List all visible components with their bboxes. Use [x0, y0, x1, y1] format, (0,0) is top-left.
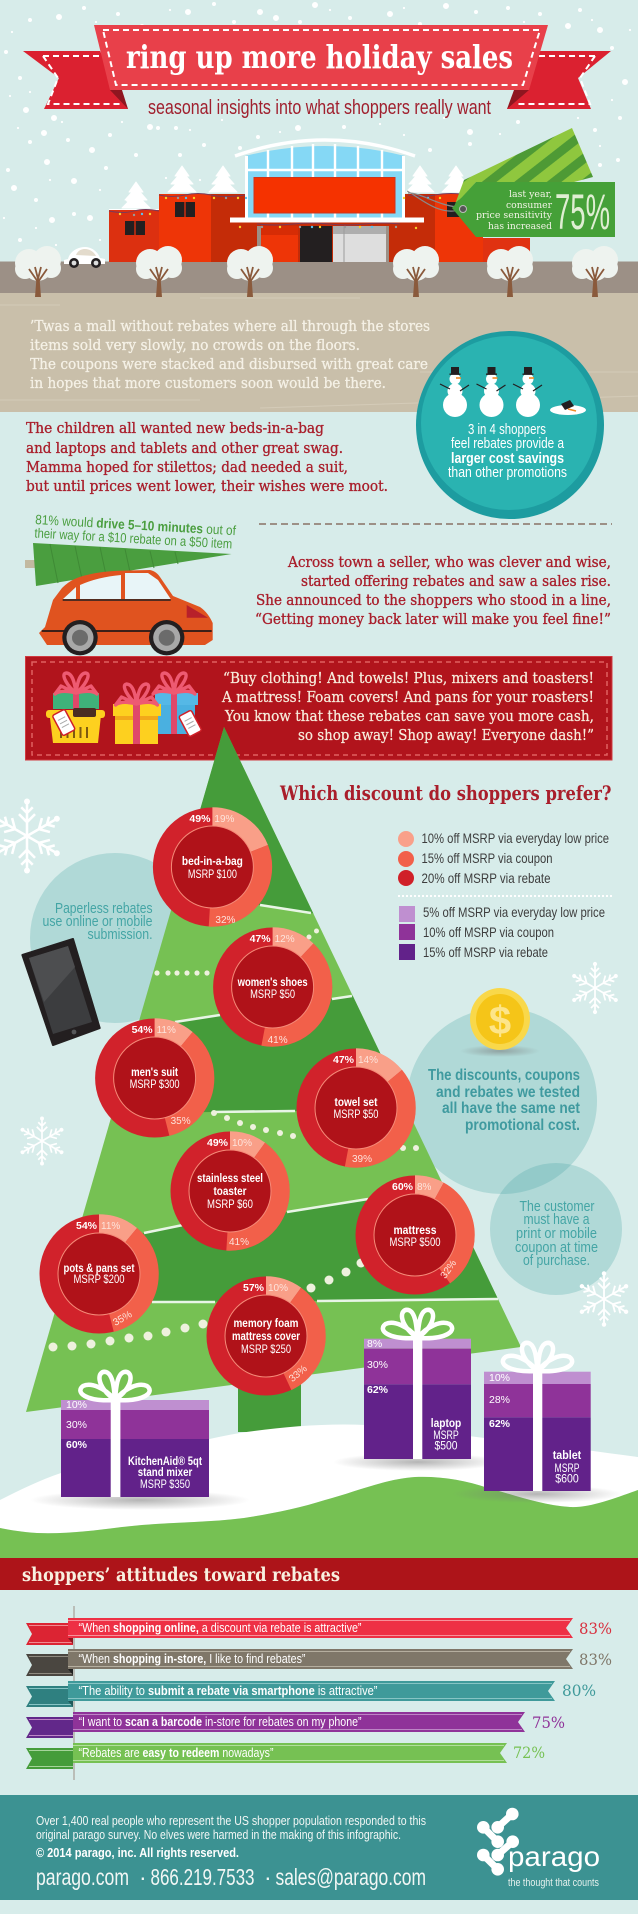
bar: shopping in-store 83%: “When shopping in-store, I like to find rebates” — [78, 1652, 306, 1666]
tag text — [476, 189, 553, 232]
top dark band — [200, 727, 314, 914]
drive stat text: their way for a $10 rebate on a $50 item — [34, 525, 233, 552]
verse 3: started offering rebates and saw a sales rise. — [301, 572, 611, 590]
tree on car roof — [33, 543, 232, 586]
gift values: 8% — [367, 1338, 382, 1350]
stat text: 3 in 4 shoppers — [468, 421, 546, 438]
gift label: MSRP $350 — [140, 1477, 190, 1491]
gift: stand mixer — [30, 1372, 250, 1510]
verse 1 — [30, 317, 430, 392]
survey note: original parago survey. No elves were harmed in the making of this infographic. — [36, 1828, 401, 1842]
donut chart: bed-in-a-bag — [153, 808, 272, 926]
tree trunk — [238, 1380, 301, 1432]
donut chart: mattress: 60% — [392, 1181, 414, 1193]
donut chart: towel set: 47% — [333, 1054, 355, 1066]
subtitle: seasonal insights into what shoppers really want — [148, 97, 491, 119]
snow hill — [0, 1424, 638, 1533]
donut chart: bed-in-a-bag: MSRP $100 — [188, 867, 237, 881]
gift values — [66, 1399, 88, 1451]
donut chart: women's shoes — [213, 928, 332, 1046]
verse 4: “Buy clothing! And towels! Plus, mixers and toasters! — [223, 669, 594, 687]
ribbon left tail — [23, 51, 128, 109]
tag eyelet — [460, 206, 466, 212]
icon: gold coin — [460, 988, 540, 1057]
donut chart: towel set: 39% — [352, 1154, 372, 1165]
ribbon right tail — [507, 51, 611, 109]
discounts note text: and rebates we tested — [436, 1084, 580, 1101]
icon: gold coin: $ — [489, 999, 511, 1043]
snowman stat circle — [416, 331, 604, 519]
melted snowman icon — [550, 400, 586, 415]
donut chart: memory foam mattress cover: 33% — [287, 1363, 310, 1385]
stat text: than other promotions — [448, 464, 567, 481]
title ribbon — [23, 25, 611, 109]
donut chart: towel set: MSRP $50 — [334, 1107, 379, 1121]
gift label: laptop — [431, 1416, 461, 1430]
verse 1: in hopes that more customers soon would be there. — [30, 374, 386, 392]
donut chart: memory foam mattress cover: mattress cover — [232, 1329, 300, 1343]
customer note text — [515, 1199, 598, 1269]
road — [0, 262, 638, 293]
verse 4 — [221, 669, 594, 744]
donut chart: mattress: MSRP $500 — [390, 1235, 441, 1249]
parago logo: the thought that counts — [508, 1877, 599, 1889]
verse 1: ’Twas a mall without rebates where all through the stores — [30, 317, 430, 335]
gift label: tablet — [553, 1448, 581, 1462]
discounts blob — [407, 1008, 597, 1194]
gift values — [489, 1372, 511, 1430]
falling snow — [4, 4, 630, 245]
donut chart: men's suit: men's suit — [131, 1065, 178, 1079]
discounts note text: all have the same net — [442, 1100, 581, 1117]
green tag — [452, 182, 615, 237]
verse 4: You know that these rebates can save you more cash, — [224, 707, 594, 725]
legend: donuts — [398, 830, 609, 886]
car with tree illustration — [25, 512, 237, 655]
bar: smartphone 80%: 80% — [562, 1681, 596, 1700]
legend: gifts — [399, 904, 605, 960]
discounts note text: promotional cost. — [465, 1117, 580, 1134]
discounts note text — [428, 1067, 581, 1134]
contact line: 866.219.7533 — [150, 1864, 254, 1890]
price tag callout — [407, 128, 615, 240]
footer — [0, 1795, 638, 1900]
bar: shopping online 83%: 83% — [579, 1619, 612, 1638]
donut chart: bed-in-a-bag: 49% — [189, 813, 211, 825]
donut chart: pots and pans set: MSRP $200 — [74, 1272, 125, 1286]
icon: blue gift — [153, 673, 202, 737]
bar: smartphone 80% — [26, 1681, 596, 1707]
verse 3 — [255, 553, 611, 628]
legend labels purple: 15% off MSRP via rebate — [423, 944, 548, 960]
discounts note text: The discounts, coupons — [428, 1067, 580, 1084]
donut chart: men's suit: 54% — [132, 1024, 153, 1036]
donut chart: women's shoes: 47% — [250, 933, 271, 945]
donut chart: memory foam mattress cover — [206, 1276, 326, 1396]
donut chart: memory foam mattress cover: MSRP $250 — [241, 1342, 291, 1356]
teal circle — [416, 331, 604, 519]
donut chart: bed-in-a-bag: 32% — [215, 915, 236, 926]
parago logo — [477, 1808, 600, 1889]
arched window — [235, 140, 415, 222]
donut chart: stainless steel toaster: 10% — [232, 1138, 252, 1149]
gift values: 28% — [489, 1394, 510, 1406]
legend labels purple: 10% off MSRP via coupon — [423, 924, 554, 940]
donut chart: memory foam mattress cover: 57% — [243, 1282, 265, 1294]
panel background — [26, 656, 612, 760]
drive stat text: 81% would drive 5–10 minutes out of — [35, 512, 237, 538]
donut chart: mattress — [356, 1176, 474, 1294]
header text: shoppers’ attitudes toward rebates — [22, 1564, 340, 1586]
customer note text: coupon at time — [515, 1240, 598, 1256]
snowflake large left — [0, 799, 63, 873]
legend labels red — [422, 830, 609, 886]
gift label: stand mixer — [138, 1465, 193, 1479]
donut chart: pots and pans set: 35% — [111, 1309, 134, 1329]
paperless blob — [30, 853, 200, 1023]
gift values: 10% — [66, 1399, 87, 1411]
gift values: 30% — [66, 1419, 87, 1431]
donut chart: men's suit: MSRP $300 — [130, 1077, 180, 1091]
gift label: $500 — [434, 1438, 458, 1452]
verse 1: items sold very slowly, no crowds on the floors. — [30, 336, 360, 354]
donut chart: memory foam mattress cover: memory foam — [234, 1316, 298, 1330]
gift label: KitchenAid® 5qt — [128, 1454, 202, 1468]
snow-covered roadside trees — [15, 246, 618, 297]
contact line — [36, 1864, 426, 1890]
donut chart: pots and pans set: 11% — [101, 1221, 120, 1232]
gift label: MSRP — [433, 1428, 459, 1442]
bar: shopping in-store 83% — [26, 1649, 612, 1676]
tag text: last year, — [509, 189, 552, 200]
ribbon main band — [94, 25, 548, 90]
axis — [74, 1606, 75, 1780]
donut chart: mattress: mattress — [394, 1223, 437, 1237]
paperless text: use online or mobile — [42, 914, 152, 930]
parago logo: parago — [508, 1841, 600, 1872]
donut chart: stainless steel toaster — [170, 1132, 290, 1250]
entrance — [245, 222, 389, 262]
gift: laptop — [333, 1310, 503, 1471]
survey note — [36, 1814, 426, 1842]
donut chart: stainless steel toaster: 41% — [229, 1237, 249, 1248]
verse 1: The coupons were stacked and disbursed with great care — [30, 355, 428, 373]
verse 3: “Getting money back later will make you feel fine!” — [255, 610, 611, 628]
gift: tablet — [452, 1343, 622, 1503]
gift bow — [503, 1343, 572, 1371]
contact line: · — [139, 1864, 147, 1890]
small white car — [64, 247, 105, 268]
header band — [0, 1558, 638, 1590]
donut chart: stainless steel toaster: MSRP $60 — [207, 1197, 253, 1211]
tree trunk on car — [25, 560, 35, 568]
customer note text: print or mobile — [516, 1226, 597, 1242]
verse 3: Across town a seller, who was clever and wise, — [287, 553, 611, 571]
legend swatches red — [398, 831, 414, 886]
store sign — [254, 178, 395, 213]
bar: easy to redeem 72% — [26, 1743, 545, 1769]
paperless text: Paperless rebates — [55, 901, 152, 917]
bar: shopping online 83% — [26, 1618, 612, 1645]
decorative pale blobs — [30, 853, 622, 1295]
verse 3: She announced to the shoppers who stood in a line, — [256, 591, 611, 609]
gift values: 30% — [367, 1359, 388, 1371]
tag text: consumer — [506, 200, 552, 211]
contact line: · — [264, 1864, 272, 1890]
stat text: larger cost savings — [451, 450, 564, 467]
store left wing — [109, 194, 245, 262]
gift bow — [80, 1372, 150, 1400]
customer note text: must have a — [524, 1212, 590, 1228]
footer band — [0, 1795, 638, 1900]
bar: scan barcode 75% — [26, 1712, 565, 1738]
legend labels red: 20% off MSRP via rebate — [422, 870, 551, 886]
donut chart: bed-in-a-bag: bed-in-a-bag — [182, 854, 243, 868]
tan ground panel — [0, 293, 638, 412]
donut chart: women's shoes: MSRP $50 — [250, 987, 295, 1001]
snowy trees behind store — [122, 166, 470, 208]
donut chart: men's suit — [95, 1018, 214, 1138]
middle dark band — [178, 996, 380, 1112]
christmas tree — [26, 720, 530, 1432]
contact line: sales@parago.com — [276, 1864, 426, 1890]
icon: smartphone — [22, 939, 100, 1045]
drive stat text — [34, 512, 237, 552]
tag text: has increased — [488, 221, 552, 232]
donut chart: pots and pans set: 54% — [76, 1220, 98, 1232]
bar: easy to redeem 72%: “Rebates are easy to redeem nowadays” — [78, 1746, 274, 1760]
verse 2 — [26, 419, 388, 495]
donut chart: women's shoes: 41% — [268, 1035, 288, 1046]
snowflakes — [0, 799, 631, 1327]
icon: shopping basket and gift — [46, 673, 105, 743]
red verse panel — [26, 656, 612, 760]
donut chart: stainless steel toaster: stainless steel — [197, 1171, 263, 1185]
store right wing — [389, 194, 530, 262]
snowflake left lower — [18, 1117, 66, 1165]
store illustration — [15, 140, 618, 297]
snowflake right — [570, 962, 620, 1014]
tag text: price sensitivity — [476, 210, 553, 221]
paperless text: submission. — [88, 927, 152, 943]
tag string — [407, 191, 462, 211]
stat text — [448, 421, 567, 481]
legend labels red: 15% off MSRP via coupon — [422, 850, 552, 866]
customer note text: The customer — [520, 1199, 595, 1215]
donut chart: bed-in-a-bag: 19% — [214, 814, 235, 825]
verse 2: Mamma hoped for stilettos; dad needed a suit, — [26, 458, 348, 476]
verse 4: so shop away! Shop away! Everyone dash!” — [298, 726, 594, 744]
legend labels purple — [423, 904, 605, 960]
customer note text: of purchase. — [523, 1253, 590, 1269]
red car — [39, 570, 213, 655]
donut chart: men's suit: 35% — [171, 1116, 191, 1127]
snowflake lower right — [577, 1271, 631, 1327]
bar: scan barcode 75%: “I want to scan a barcode in-store for rebates on my phone” — [78, 1715, 362, 1729]
customer blob — [490, 1163, 622, 1295]
icon: yellow gift — [113, 684, 161, 744]
donut chart: pots and pans set: pots & pans set — [64, 1261, 134, 1275]
donut chart: men's suit: 11% — [157, 1025, 176, 1036]
bar: shopping online 83%: “When shopping online, a discount via rebate is attractive” — [78, 1621, 362, 1635]
ribbon bar chart — [26, 1606, 612, 1780]
bar: easy to redeem 72%: 72% — [513, 1743, 545, 1762]
donut chart: women's shoes: women's shoes — [237, 975, 308, 989]
donut chart: mattress: 8% — [417, 1182, 432, 1193]
tinsel lines — [144, 905, 498, 1302]
donut chart: towel set — [296, 1048, 416, 1168]
lower dark band — [142, 1200, 498, 1302]
gift label — [431, 1416, 461, 1452]
donut chart: pots and pans set — [40, 1214, 158, 1334]
striped tag — [454, 128, 593, 207]
donut chart: mattress: 32% — [439, 1258, 459, 1281]
donut chart: memory foam mattress cover: 10% — [268, 1283, 288, 1294]
bar: shopping in-store 83%: 83% — [579, 1650, 612, 1669]
stacked bar gift — [484, 1372, 591, 1491]
gift values: 60% — [66, 1439, 88, 1451]
gift values: 10% — [489, 1372, 510, 1384]
gift bow — [383, 1310, 452, 1338]
gift label: $600 — [555, 1472, 579, 1486]
attitudes header — [0, 1558, 638, 1590]
donut chart: stainless steel toaster: 49% — [207, 1137, 229, 1149]
stat text: feel rebates provide a — [451, 435, 565, 452]
gift label — [553, 1448, 581, 1486]
verse 2: and laptops and tablets and other great swag. — [26, 439, 343, 457]
donut chart: towel set: towel set — [334, 1095, 378, 1109]
tree body — [26, 727, 521, 1412]
canopy — [230, 218, 424, 222]
garland dots — [48, 928, 419, 1352]
string lights — [109, 194, 470, 228]
bar: smartphone 80%: “The ability to submit a rebate via smartphone is attractive” — [78, 1684, 378, 1698]
donut chart: stainless steel toaster: toaster — [214, 1184, 247, 1198]
gift values — [367, 1338, 389, 1396]
donut chart: towel set: 14% — [358, 1055, 378, 1066]
gift label — [128, 1454, 202, 1491]
bar: scan barcode 75%: 75% — [532, 1713, 565, 1732]
paperless text — [42, 901, 152, 943]
copyright: © 2014 parago, inc. All rights reserved. — [36, 1846, 239, 1860]
title: ring up more holiday sales — [126, 38, 513, 76]
donut chart: women's shoes: 12% — [275, 934, 295, 945]
green foreground — [0, 1477, 638, 1558]
contact line: parago.com — [36, 1864, 129, 1890]
stacked bar gift — [364, 1339, 471, 1459]
verse 2: but until prices went lower, their wishes were moot. — [26, 477, 388, 495]
gift label: MSRP — [554, 1461, 580, 1475]
verse 2: The children all wanted new beds-in-a-bag — [26, 419, 324, 437]
snowmen icons — [440, 367, 542, 417]
gift values: 62% — [489, 1418, 511, 1430]
stacked bar gift — [61, 1400, 209, 1497]
legend swatches purple — [399, 906, 415, 960]
survey note: Over 1,400 real people who represent the US shopper population responded to this — [36, 1814, 426, 1828]
verse 4: A mattress! Foam covers! And pans for your roasters! — [221, 688, 594, 706]
gift values: 62% — [367, 1384, 389, 1396]
